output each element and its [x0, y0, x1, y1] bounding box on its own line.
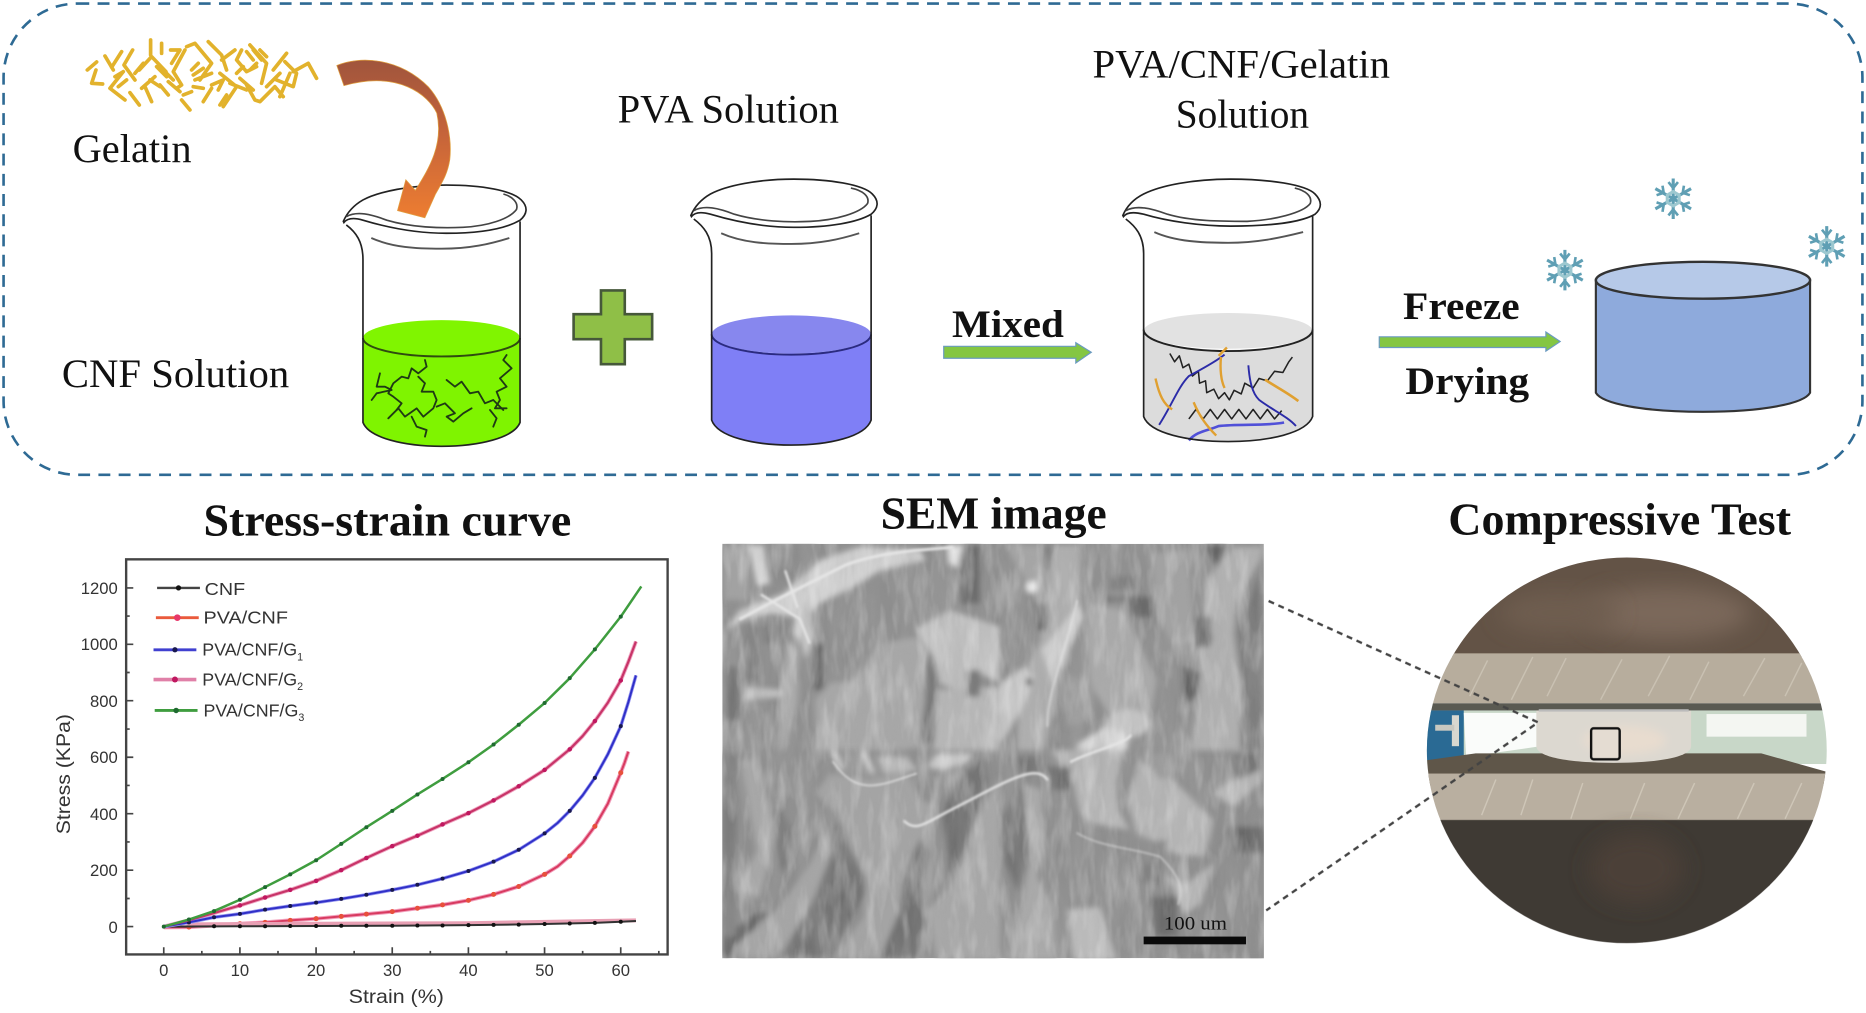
legend: PVA/CNF/G3: [155, 700, 304, 724]
label: Gelatin: Gelatin: [73, 126, 192, 171]
polymer chains: [1156, 348, 1298, 440]
polymer chains: [372, 355, 512, 437]
arrow: Freeze Drying: [1379, 332, 1560, 351]
panel border: [4, 4, 1862, 475]
icon: plus sign: [574, 290, 652, 364]
chart: stress-strain curve: [54, 559, 668, 1008]
series: CNF: [164, 920, 636, 927]
SEM lower right: [1002, 750, 1263, 960]
arrow: Mixed: [944, 343, 1091, 363]
y axis tick labels: 800: [90, 692, 118, 711]
label: PVA/CNF/Gelatin Solution: PVA/CNF/Gelatin: [1092, 41, 1390, 86]
icon: snowflake left: [1547, 250, 1583, 290]
beaker: CNF solution: [343, 185, 526, 446]
panel: SEM image: [722, 544, 1264, 960]
y axis tick labels: 200: [90, 861, 118, 880]
y axis tick labels: 600: [90, 748, 118, 767]
heading: Compressive Test: Compressive Test: [1448, 494, 1791, 544]
series: PVA/CNF/G3: [164, 586, 641, 927]
legend: PVA/CNF/G1: PVA/CNF/G: [202, 640, 297, 660]
glass: [691, 179, 877, 445]
label: CNF Solution: CNF Solution: [62, 351, 289, 396]
y axis tick labels: 1200: [81, 579, 118, 598]
photo: compressive test: [1416, 547, 1833, 951]
x axis tick labels: 10: [231, 961, 249, 980]
legend: PVA/CNF/G2: 2: [297, 681, 303, 693]
glass: [1123, 179, 1320, 442]
series: PVA/CNF/G2: [164, 641, 636, 927]
bright fibre highlights: [740, 547, 1180, 904]
SEM upper left: [723, 545, 1000, 750]
scale bar: 100 um: [1164, 913, 1227, 934]
label: PVA Solution: PVA Solution: [618, 87, 839, 132]
x axis tick labels: 50: [535, 961, 554, 980]
legend: PVA/CNF: PVA/CNF: [203, 608, 288, 628]
sample marker square: [1591, 728, 1620, 759]
series: PVA/CNF: [164, 752, 628, 927]
x axis tick labels: 30: [383, 961, 402, 980]
label: PVA/CNF/Gelatin Solution: Solution: [1176, 91, 1309, 136]
legend: PVA/CNF/G3: PVA/CNF/G: [203, 700, 298, 720]
heading: Stress-strain curve: Stress-strain curve: [203, 496, 571, 546]
legend: PVA/CNF/G1: [154, 640, 303, 663]
y axis title: Stress (KPa): [54, 714, 75, 834]
glass: [343, 185, 526, 446]
label: Drying: Drying: [1405, 360, 1530, 403]
legend: PVA/CNF: [156, 608, 288, 628]
x axis tick labels: 0: [159, 961, 168, 980]
arrow: gelatin added to solution: [337, 60, 450, 218]
label: Mixed: Mixed: [952, 303, 1064, 346]
legend: CNF: [157, 579, 245, 599]
icon: snowflake right: [1809, 226, 1845, 267]
panel: preparation process: [4, 4, 1862, 475]
legend: PVA/CNF/G3: 3: [298, 712, 304, 724]
SEM lower left: [723, 752, 1000, 960]
data series: [164, 586, 641, 927]
series: PVA/CNF/G2 halo: [164, 641, 636, 927]
y axis tick labels: 0: [109, 918, 118, 937]
label: Freeze: Freeze: [1403, 285, 1520, 328]
legend: PVA/CNF/G2: [154, 669, 303, 693]
heading: SEM image: SEM image: [881, 488, 1107, 538]
x axis title: Strain (%): [349, 987, 444, 1008]
icon: gelatin fibres: [87, 40, 317, 110]
x axis tick labels: 40: [459, 961, 478, 980]
zoom lines: SEM to sample: [1266, 601, 1538, 910]
plot frame and ticks: [126, 559, 668, 954]
label: PVA/CNF/Gelatin Solution: [1092, 41, 1390, 136]
series: PVA/CNF/G1: [164, 675, 636, 927]
x axis tick labels: 20: [307, 961, 325, 980]
y axis tick labels: [81, 579, 118, 937]
icon: snowflake top: [1655, 179, 1691, 219]
SEM upper right: [1000, 545, 1263, 750]
legend: PVA/CNF/G1: 1: [297, 651, 303, 663]
icon: aerogel cylinder: [1596, 262, 1810, 412]
beaker: PVA/CNF/Gelatin solution: [1123, 179, 1320, 442]
legend: CNF: CNF: [205, 579, 245, 599]
x axis tick labels: 60: [611, 961, 630, 980]
x axis tick labels: [159, 961, 630, 980]
legend: PVA/CNF/G2: PVA/CNF/G: [202, 669, 297, 689]
y axis tick labels: 1000: [81, 635, 118, 654]
beaker: PVA solution: [691, 179, 877, 445]
scale bar: [1144, 913, 1246, 944]
y axis tick labels: 400: [90, 805, 118, 824]
legend: [154, 579, 304, 724]
